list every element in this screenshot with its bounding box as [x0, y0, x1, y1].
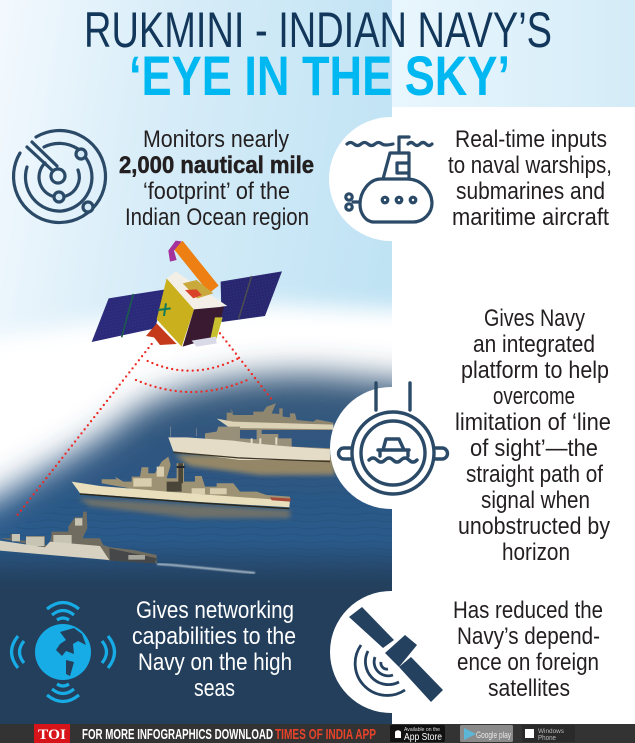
top-right title band: [392, 0, 635, 107]
text: networking: Navy on the high: [138, 649, 292, 676]
solar panel: left: [92, 289, 166, 342]
footer call to action: FOR MORE INFOGRAPHICS DOWNLOAD: [82, 726, 273, 743]
satellite dark face: [183, 307, 224, 347]
panel: boat circle: [330, 387, 452, 509]
text: monitors: Monitors nearly: [143, 126, 289, 153]
text: networking: seas: [194, 675, 235, 702]
text: line of sight: of sight’—the: [470, 435, 598, 462]
text: real-time inputs: submarines and: [456, 178, 605, 205]
red base: [146, 323, 177, 345]
text: line of sight: straight path of: [466, 461, 603, 488]
red dotted signal lines: [17, 333, 272, 516]
text: networking: capabilities to the: [132, 623, 296, 650]
text: real-time inputs: [448, 126, 612, 231]
text: line of sight: unobstructed by: [458, 513, 610, 540]
text: line of sight: [455, 305, 611, 566]
app store badge: Available on the: [404, 727, 440, 733]
google play badge: [460, 725, 513, 742]
text: real-time inputs: Real-time inputs: [455, 126, 607, 153]
antenna feed: [168, 241, 182, 262]
text: real-time inputs: maritime aircraft: [452, 204, 609, 231]
text: dependence: ence on foreign: [457, 649, 599, 676]
footer bar: [0, 724, 635, 743]
icon: submarine: [346, 137, 432, 222]
ship: far: [217, 403, 333, 430]
text: monitors: ‘footprint’ of the: [143, 178, 290, 205]
panel: submarine circle: [329, 117, 453, 241]
satellite body top: [167, 272, 227, 309]
title line 2: ‘EYE IN THE SKY’: [129, 44, 510, 107]
ship: foreground frigate: [0, 512, 157, 563]
app store badge: App Store: [404, 732, 442, 743]
icon: globe with signals: [12, 602, 114, 702]
title: [84, 2, 552, 107]
text: dependence: [453, 597, 603, 702]
text: dependence: Navy’s depend-: [457, 623, 600, 650]
windows phone badge: Phone: [538, 735, 556, 742]
top foil: [183, 280, 213, 298]
sea glints: [78, 455, 335, 573]
satellite body side: [157, 278, 194, 347]
TOI logo: TOI: [38, 727, 66, 743]
text: line of sight: limitation of ‘line: [455, 409, 611, 436]
panel: satellite circle: [330, 591, 452, 713]
text: line of sight: an integrated: [473, 331, 595, 358]
text: line of sight: overcome: [493, 383, 575, 410]
panel: sky and sea background: [0, 0, 392, 724]
icon: boat porthole: [338, 383, 448, 494]
text: monitors: Indian Ocean region: [125, 204, 309, 231]
text: networking: [132, 597, 296, 702]
text: networking: Gives networking: [136, 597, 294, 624]
TOI logo: [34, 724, 70, 743]
satellite image: [92, 241, 282, 347]
app store badge: [390, 725, 445, 743]
text: dependence: Has reduced the: [453, 597, 603, 624]
text: dependence: satellites: [488, 675, 570, 702]
thruster cluster: [192, 337, 217, 347]
text: real-time inputs: to naval warships,: [448, 152, 612, 179]
antenna boom: [178, 245, 214, 289]
text: monitors: 2,000 nautical mile: [119, 152, 314, 179]
bottom-right white panel: [392, 107, 635, 724]
ship: landing vessel: [168, 427, 330, 462]
green detail: [158, 303, 171, 316]
footer app name: TIMES OF INDIA APP: [275, 726, 376, 743]
google play badge: Google play: [476, 730, 511, 741]
icon: satellite signal: [349, 607, 443, 702]
windows phone badge: Windows: [538, 729, 564, 735]
text: line of sight: platform to help: [461, 357, 609, 384]
signal arcs: [12, 602, 114, 702]
text: line of sight: horizon: [502, 539, 570, 566]
text: line of sight: Gives Navy: [484, 305, 585, 332]
solar panel: right: [221, 271, 282, 322]
ships: [0, 403, 333, 563]
text: monitors: [119, 126, 314, 231]
icon: radar: [14, 131, 106, 223]
ship: destroyer: [72, 457, 291, 509]
windows phone badge: [522, 725, 575, 742]
satellite yellow strip: [211, 317, 223, 338]
globe: [35, 624, 91, 680]
text: line of sight: signal when: [481, 487, 590, 514]
